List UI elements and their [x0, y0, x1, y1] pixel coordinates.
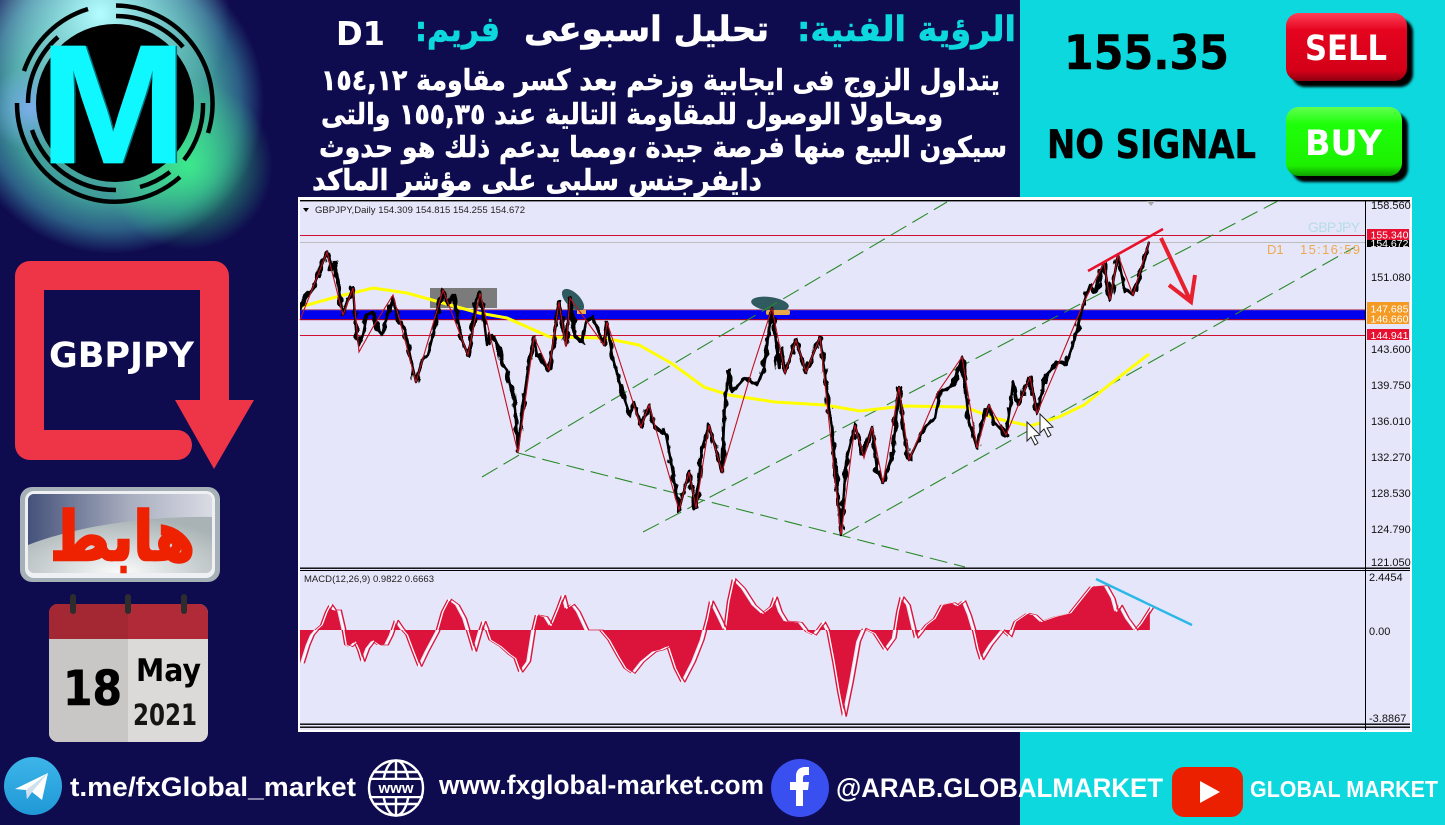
price labels: 147.685 — [1370, 304, 1409, 316]
macd signal line — [302, 579, 1154, 717]
price labels: 155.340 — [1370, 230, 1409, 242]
price labels: 154.672 — [1370, 238, 1409, 250]
cursor icons — [1027, 414, 1053, 445]
annotation markers — [558, 285, 790, 315]
logo: M — [39, 10, 187, 200]
logo: M — [41, 10, 189, 200]
footer telegram — [4, 757, 356, 815]
zigzag line — [300, 242, 1149, 535]
buy button: BUY — [1305, 124, 1383, 164]
price line — [300, 242, 1149, 535]
top marker — [1147, 201, 1155, 206]
price axis: 128.530 — [1371, 488, 1411, 500]
footer telegram: t.me/fxGlobal_market — [70, 772, 356, 802]
calendar — [49, 594, 208, 742]
title: تحليل اسبوعى — [524, 10, 769, 50]
price axis — [1371, 200, 1411, 569]
title — [336, 10, 1016, 53]
macd divergence line — [1096, 579, 1192, 625]
title: D1 — [336, 14, 385, 53]
analysis text: ومحاولا الوصول للمقاومة التالية عند ١٥٥,٣٥ والتى — [321, 97, 943, 131]
title: فريم: — [415, 10, 500, 50]
price axis: 143.600 — [1371, 344, 1411, 356]
analysis text: سيكون البيع منها فرصة جيدة ،ومما يدعم ذلك هو حدوث — [319, 130, 1007, 164]
analysis text: يتداول الزوج فى ايجابية وزخم بعد كسر مقاومة ١٥٤,١٢ — [321, 63, 1000, 97]
direction badge: هابط — [50, 498, 195, 577]
pair name: GBPJPY — [49, 336, 195, 376]
macd label: MACD(12,26,9) 0.9822 0.6663 — [304, 574, 434, 585]
logo — [0, 0, 280, 262]
sell button: SELL — [1305, 29, 1387, 69]
price axis: 158.560 — [1371, 200, 1411, 212]
price chart panel — [298, 197, 1412, 732]
date day: 18 — [63, 661, 122, 717]
target price: 155.35 — [1064, 26, 1229, 81]
analysis text: دايفرجنس سلبى على مؤشر الماكد — [312, 163, 762, 197]
buy button — [1286, 107, 1408, 182]
timeframe countdown — [1267, 242, 1360, 257]
annotation box — [430, 288, 497, 308]
channel lines — [482, 201, 1355, 567]
price labels: 144.941 — [1370, 330, 1409, 342]
price axis: 136.010 — [1371, 416, 1411, 428]
price labels — [1367, 229, 1409, 342]
footer facebook — [771, 759, 1163, 817]
footer youtube — [1172, 767, 1438, 817]
price axis: 124.790 — [1371, 524, 1411, 536]
signal status: NO SIGNAL — [1047, 123, 1256, 168]
rising trendline — [1088, 229, 1163, 271]
macd axis: 0.00 — [1369, 626, 1390, 638]
price labels: 146.660 — [1370, 314, 1409, 326]
pair arrow icon — [15, 261, 254, 469]
timeframe countdown: D1 — [1267, 242, 1284, 257]
price axis: 151.080 — [1371, 272, 1411, 284]
footer website — [369, 760, 764, 816]
sell button — [1286, 13, 1413, 87]
price axis: 132.270 — [1371, 452, 1411, 464]
footer website: www — [377, 780, 414, 797]
macd axis: 2.4454 — [1369, 572, 1403, 584]
date month: May — [136, 653, 201, 689]
macd axis: -3.8867 — [1369, 713, 1406, 725]
horizontal levels — [300, 235, 1365, 336]
moving average — [300, 288, 1149, 426]
footer website: www.fxglobal-market.com — [438, 770, 764, 800]
macd axis — [1369, 572, 1406, 725]
date year: 2021 — [133, 698, 197, 732]
title: الرؤية الفنية: — [797, 10, 1016, 50]
resistance zone — [300, 309, 1365, 320]
analysis text — [312, 63, 1007, 197]
chart header: GBPJPY,Daily 154.309 154.815 154.255 154.672 — [315, 205, 525, 216]
timeframe countdown: 15:16:59 — [1300, 242, 1360, 257]
price axis: 121.050 — [1371, 557, 1411, 569]
footer facebook: @ARAB.GLOBALMARKET — [836, 773, 1163, 803]
watermark symbol: GBPJPY — [1308, 219, 1361, 235]
price axis: 139.750 — [1371, 380, 1411, 392]
bearish arrow — [1161, 238, 1195, 302]
macd histogram — [300, 579, 1150, 717]
